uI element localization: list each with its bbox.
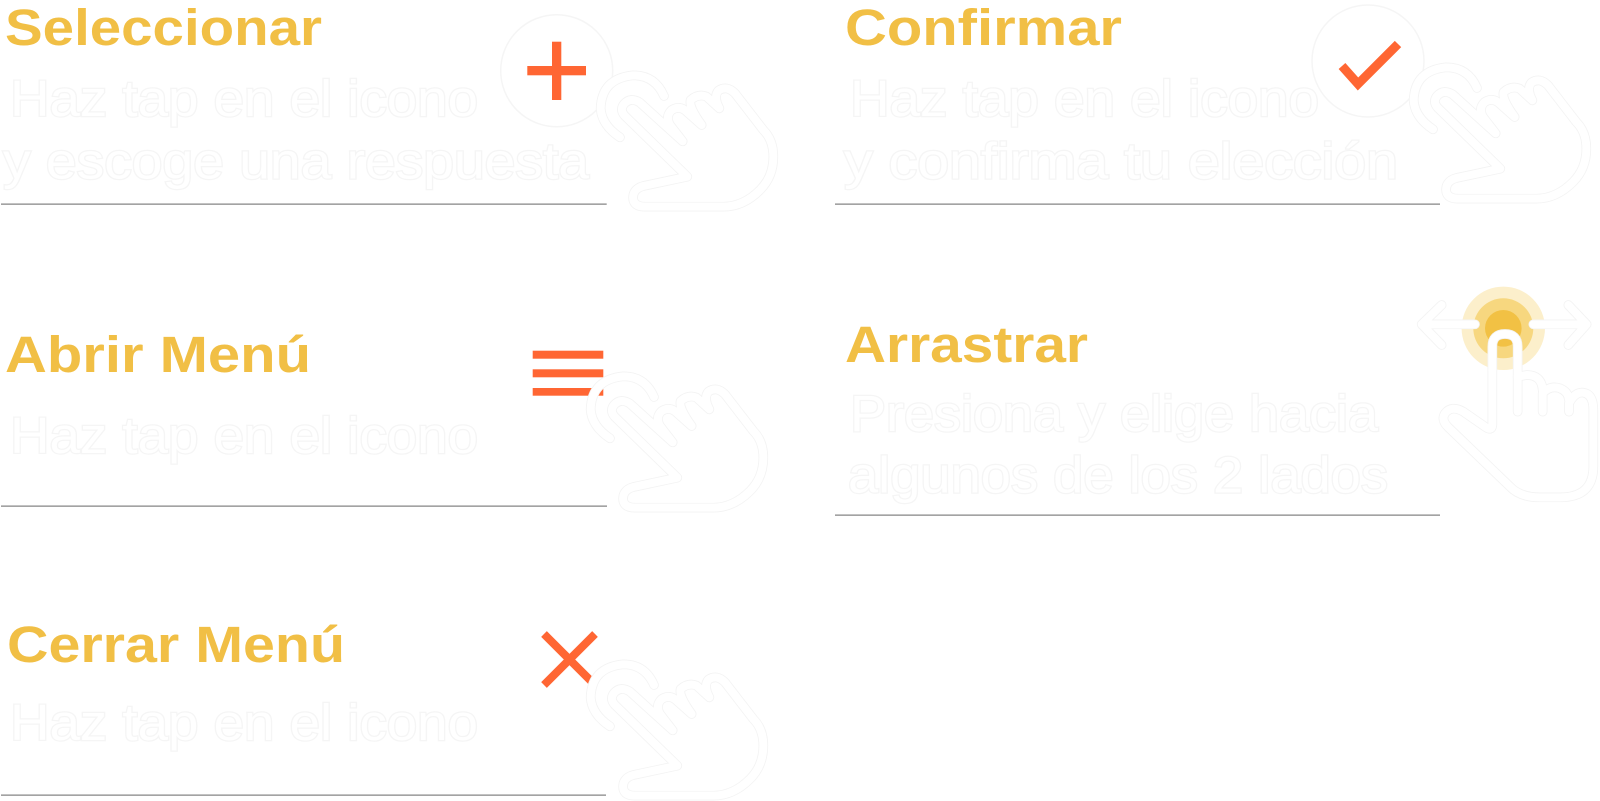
panel: Abrir Menú: [1, 326, 763, 508]
icon: drag target circles: [1462, 287, 1545, 370]
heading: Arrastrar: Arrastrar: [845, 316, 1088, 373]
heading: Confirmar: Confirmar: [845, 0, 1122, 56]
text block: instruction: Haz tap en el icono: [850, 70, 1319, 127]
heading: Seleccionar: Seleccionar: [5, 0, 322, 56]
text block: instruction: Haz tap en el icono: [10, 70, 478, 127]
heading: Cerrar Menú: Cerrar Menú: [7, 616, 345, 673]
text block: instruction: Haz tap en el icono: [10, 694, 478, 751]
icon: plus in circle: [501, 15, 613, 127]
icon: check in circle: [1312, 5, 1424, 117]
text block: instruction: algunos de los 2 lados: [848, 446, 1388, 504]
text block: instruction: y confirma tu elección: [844, 132, 1398, 190]
text block: instruction: [844, 70, 1398, 190]
text block: instruction: Presiona y elige hacia: [850, 385, 1379, 442]
text block: instruction: [848, 385, 1388, 504]
icon: tapping hand: [591, 664, 763, 796]
panel: Confirmar: [835, 0, 1586, 205]
panel: Cerrar Menú: [1, 616, 763, 796]
icon: close cross: [544, 634, 595, 685]
icon: tapping hand: [1414, 67, 1586, 199]
text block: instruction: Haz tap en el icono: [10, 407, 478, 464]
text block: instruction: [3, 70, 590, 190]
icon: dragging hand with arrows: [1422, 305, 1593, 497]
icon: tapping hand: [591, 376, 763, 508]
panel: Arrastrar: [835, 287, 1593, 516]
icon: tapping hand: [601, 75, 773, 207]
icon: hamburger menu: [533, 351, 603, 396]
heading: Abrir Menú: Abrir Menú: [5, 326, 311, 383]
text block: instruction: y escoge una respuesta: [3, 132, 590, 190]
panel: Seleccionar: [1, 0, 773, 207]
